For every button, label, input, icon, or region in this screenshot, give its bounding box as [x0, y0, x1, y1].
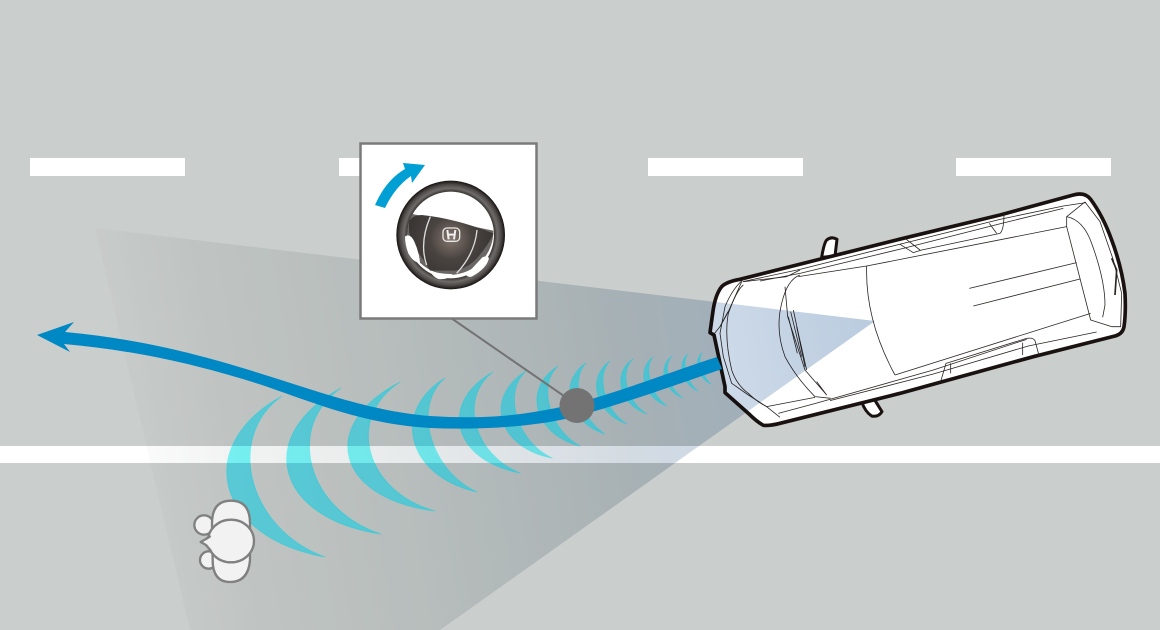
sensing cone	[95, 228, 875, 630]
car mirrors	[822, 238, 882, 416]
infographic: steering assist to avoid pedestrian	[0, 142, 1160, 630]
steering wheel inset panel	[360, 144, 536, 318]
icon: steering wheel	[396, 181, 505, 289]
pedestrian seen from above	[194, 501, 254, 582]
connector line to steering inset	[451, 318, 577, 405]
car body	[710, 194, 1125, 425]
car detail lines	[714, 202, 1122, 417]
road edge line	[0, 446, 1160, 463]
lane dashes	[30, 158, 1111, 176]
icon: steering direction arrow	[375, 163, 425, 208]
steering point marker	[560, 388, 594, 423]
avoidance path arrow	[37, 322, 722, 429]
sensor wave arcs	[227, 353, 711, 557]
car: top view	[710, 194, 1125, 425]
